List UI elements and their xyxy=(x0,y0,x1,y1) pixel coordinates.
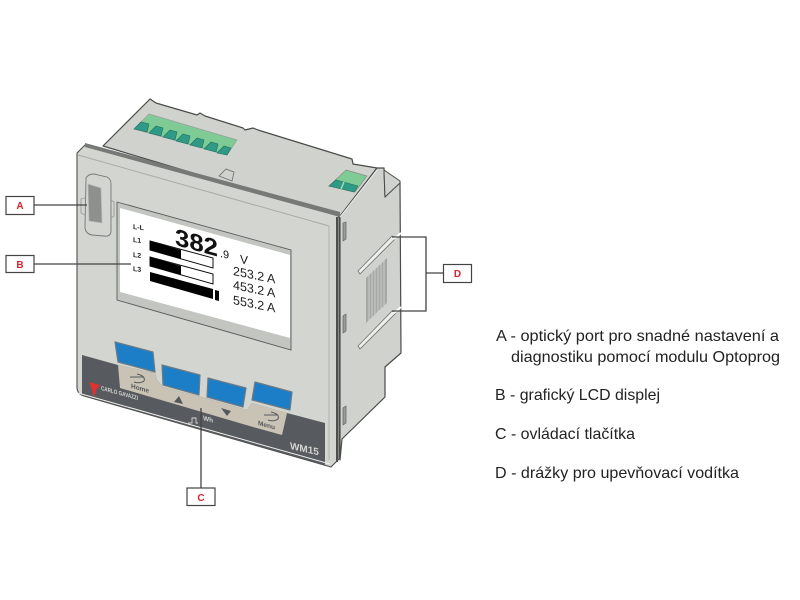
callout B: B xyxy=(16,260,24,271)
LCD voltage reading: .9 xyxy=(220,248,229,262)
callout B xyxy=(6,256,131,272)
legend text xyxy=(495,328,780,482)
LCD labels xyxy=(133,224,145,274)
brand logo xyxy=(89,382,138,402)
side ventilation slots xyxy=(366,258,387,323)
LCD current readings xyxy=(233,264,276,316)
dark control band xyxy=(82,355,325,465)
button labels xyxy=(130,374,278,432)
callout A xyxy=(6,196,87,214)
LCD labels: L2 xyxy=(133,252,141,260)
device top face xyxy=(103,99,377,217)
LCD current readings: 453.2 A xyxy=(233,278,276,301)
pulse Wh label: Wh xyxy=(203,415,213,425)
callout D: D xyxy=(454,269,461,280)
device: WM15 energy meter xyxy=(77,99,401,467)
button labels: Home xyxy=(131,383,149,395)
buttons xyxy=(115,342,292,410)
model label: WM15 xyxy=(290,441,319,458)
side clips xyxy=(343,222,346,241)
pulse Wh label xyxy=(188,415,213,425)
LCD labels: L-L xyxy=(133,224,145,232)
legend text: C - ovládací tlačítka xyxy=(495,426,635,443)
LCD voltage reading xyxy=(175,224,249,268)
legend text: B - grafický LCD displej xyxy=(495,387,660,404)
LCD bar L2 xyxy=(150,257,213,284)
LCD voltage reading: V xyxy=(240,252,249,268)
side mounting groove upper xyxy=(358,236,396,274)
brand logo: CARLO GAVAZZI xyxy=(101,385,138,402)
button labels: Menu xyxy=(258,420,275,432)
front panel xyxy=(77,143,340,467)
LCD bar L3 xyxy=(150,272,219,301)
LCD current readings: 553.2 A xyxy=(233,293,276,316)
optical port xyxy=(81,174,114,236)
callout C xyxy=(187,408,215,506)
LCD bar L1 xyxy=(150,241,213,268)
legend text: A - optický port pro snadné nastavení a xyxy=(496,328,779,345)
LCD labels: L1 xyxy=(133,237,141,245)
callout A: A xyxy=(16,201,24,212)
side mounting groove lower xyxy=(358,311,396,349)
legend text: diagnostiku pomocí modulu Optoprog xyxy=(511,349,780,366)
device side face xyxy=(340,168,401,460)
terminal block: small green xyxy=(329,170,367,192)
legend text: D - drážky pro upevňovací vodítka xyxy=(495,465,739,482)
callout D xyxy=(392,237,472,311)
LCD voltage reading: 382 xyxy=(175,224,218,263)
LCD display xyxy=(117,202,291,350)
LCD current readings: 253.2 A xyxy=(233,264,276,287)
terminal block: large green xyxy=(134,114,237,155)
callout C: C xyxy=(197,493,205,504)
LCD labels: L3 xyxy=(133,266,141,274)
